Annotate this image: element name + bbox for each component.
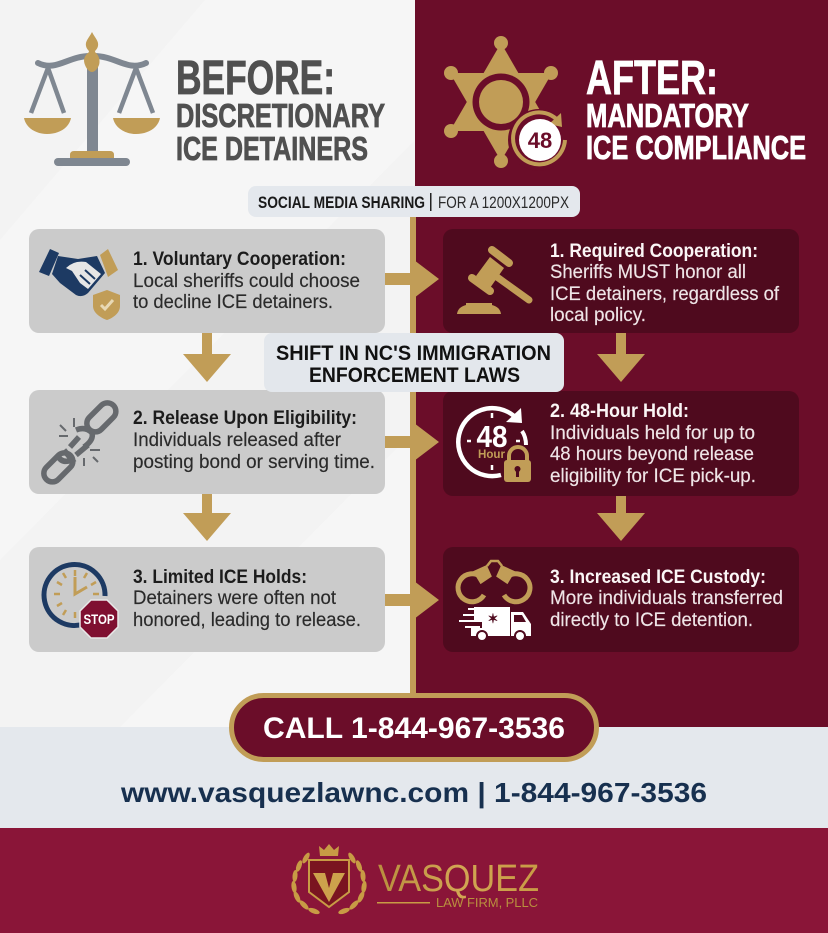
text: voluntary cooperation: 1. Voluntary Cooperation: [133,249,346,270]
contact line: www.vasquezlawnc.com | 1-844-967-3536 [120,777,707,808]
icon: clock with stop sign [44,565,118,638]
text: 48-hour hold [550,401,756,487]
icon: handshake with shield [39,249,120,320]
arrow: after step 2 to 3 [597,496,645,541]
text: required cooperation: local policy. [550,305,646,326]
text: limited ice holds: honored, leading to release. [133,610,361,631]
arrow: after step 1 to 2 [597,333,645,382]
text: 48-hour hold: 2. 48-Hour Hold: [550,401,689,422]
logo tagline: LAW FIRM, PLLC [436,895,538,910]
logo wordmark: VASQUEZ [378,858,539,900]
label: shift in nc's immigration enforcement laws [264,333,564,392]
arrow: before to after step 2 [385,423,439,461]
text: 48-hour hold: eligibility for ICE pick-up. [550,466,756,487]
call to action button [232,696,596,760]
label: social media sharing: SOCIAL MEDIA SHARING [258,193,425,212]
panel: after 2 48-hour hold [443,391,799,496]
text: limited ice holds: Detainers were often not [133,588,337,609]
label: shift in nc's immigration enforcement laws: ENFORCEMENT LAWS [309,364,520,387]
panel: before 1 voluntary cooperation [29,229,385,333]
text: limited ice holds [133,567,361,631]
logo: vasquez law firm [291,844,539,915]
panel: after 1 required cooperation [443,229,799,333]
central gold divider [410,217,416,697]
text: release upon eligibility [133,408,375,473]
heading: before [176,52,385,167]
arrow: before step 2 to 3 [183,494,231,541]
background: after side [415,0,828,727]
icon: handcuffs and transport truck: ✶ [488,611,498,626]
icon: 48 hour clock with lock: Hour [478,449,506,461]
icon: balance scales [24,32,160,166]
text: voluntary cooperation: to decline ICE detainers. [133,292,333,313]
icon: handcuffs and transport truck [458,561,531,641]
icon: 48 hour clock with lock: 48 [476,419,508,454]
heading: before: DISCRETIONARY [176,97,385,134]
text: required cooperation: ICE detainers, regardless of [550,284,780,305]
background: contact band [0,727,828,828]
background: footer band [0,828,828,933]
arrow: before step 1 to 2 [183,333,231,382]
heading: before: ICE DETAINERS [176,130,368,167]
arrow: before to after step 3 [385,581,439,619]
label: social media sharing: FOR A 1200X1200PX [438,193,569,212]
heading: before: BEFORE: [176,52,335,105]
panel: before 2 release upon eligibility [29,390,385,494]
text: 48-hour hold: Individuals held for up to [550,423,755,444]
label: social media sharing [248,186,580,217]
text: increased ice custody: 3. Increased ICE Custody: [550,567,766,588]
heading: after: MANDATORY [586,97,749,134]
text: increased ice custody: More individuals transferred [550,588,783,609]
text: release upon eligibility: Individuals released after [133,430,342,451]
text: required cooperation [550,241,780,326]
text: increased ice custody: directly to ICE detention. [550,610,753,631]
text: release upon eligibility: posting bond or serving time. [133,452,375,473]
text: required cooperation: 1. Required Cooperation: [550,241,758,262]
call to action button: CALL 1-844-967-3536 [263,712,565,745]
panel: before 3 limited ice holds [29,547,385,652]
icon: sheriff star with 48 timer: 48 [528,128,552,153]
text: 48-hour hold: 48 hours beyond release [550,444,754,465]
text: required cooperation: Sheriffs MUST honor all [550,262,746,283]
text: release upon eligibility: 2. Release Upon Eligibility: [133,408,357,429]
icon: 48 hour clock with lock [458,408,531,482]
logo emblem: crest with wreath [291,844,367,915]
icon: broken chain [40,399,119,485]
text: voluntary cooperation [133,249,360,313]
icon: clock with stop sign: STOP [84,612,114,627]
heading: after: AFTER: [586,52,718,105]
icon: gavel [457,250,529,314]
icon: sheriff star with 48 timer [444,36,570,171]
panel: after 3 increased ice custody [443,547,799,652]
arrow: before to after step 1 [385,260,439,298]
background: before side [0,0,415,727]
text: increased ice custody [550,567,783,631]
label: shift in nc's immigration enforcement laws: SHIFT IN NC'S IMMIGRATION [276,342,551,365]
heading: after [586,52,806,166]
text: voluntary cooperation: Local sheriffs could choose [133,271,360,292]
text: limited ice holds: 3. Limited ICE Holds: [133,567,307,588]
